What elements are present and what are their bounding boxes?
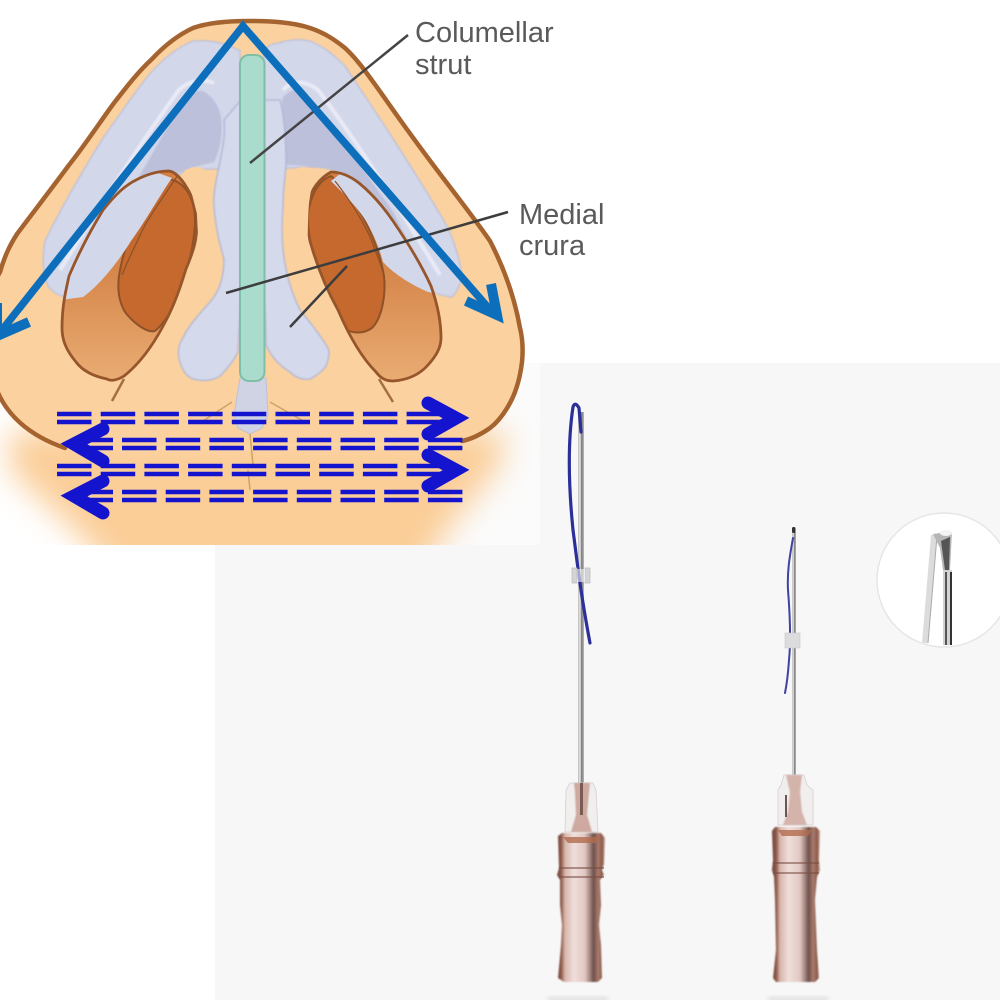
arrowhead right row 3 — [428, 455, 456, 486]
tip — [792, 527, 796, 533]
arrowhead left row 2 — [74, 429, 103, 461]
panel: nose diagram — [0, 18, 602, 545]
panel: nose diagram: strut — [415, 49, 471, 81]
label: columellar strut: Columellar — [415, 17, 554, 49]
right nostril — [307, 170, 445, 402]
cartilage: medial crura — [178, 100, 329, 380]
arrowhead right row 1 — [428, 403, 456, 434]
left nostril — [60, 170, 197, 401]
cropped caption remnants — [548, 997, 828, 1000]
shaft — [578, 412, 584, 784]
thread — [785, 538, 793, 693]
arrowhead left row 4 — [74, 481, 103, 513]
thread — [569, 404, 590, 643]
skin gaps beside medial crura — [186, 167, 205, 233]
leader line: medial crura upper — [226, 212, 508, 293]
columellar strut — [240, 55, 264, 381]
clear hub — [565, 783, 598, 832]
needle 1 — [557, 404, 605, 982]
panel: needle product background — [215, 363, 1000, 1000]
clip — [785, 633, 800, 648]
thread in inset — [925, 535, 934, 643]
panel: nose diagram: crura — [519, 230, 586, 262]
dashed double lines with arrows — [57, 403, 464, 513]
inner shadowed region — [138, 90, 222, 177]
needle 2 — [772, 527, 820, 982]
inset: needle tip detail — [877, 513, 1000, 647]
cartilage: lateral crura — [43, 40, 462, 297]
highlight stripes — [60, 81, 214, 270]
nose skin — [0, 21, 523, 448]
leader line: medial crura lower — [290, 266, 347, 327]
needle in inset — [943, 570, 952, 645]
label: medial crura: Medial — [519, 199, 604, 231]
leader line: columellar strut — [250, 35, 408, 163]
arrows: blue V from nose tip — [0, 26, 497, 336]
nose outline — [0, 21, 523, 448]
philtrum lines — [200, 402, 305, 490]
columella tip — [234, 378, 268, 434]
handle — [772, 827, 820, 982]
clip — [572, 568, 590, 583]
clear hub — [778, 775, 813, 825]
shaft — [792, 532, 796, 777]
handle — [557, 833, 605, 982]
chin shading — [0, 415, 522, 545]
